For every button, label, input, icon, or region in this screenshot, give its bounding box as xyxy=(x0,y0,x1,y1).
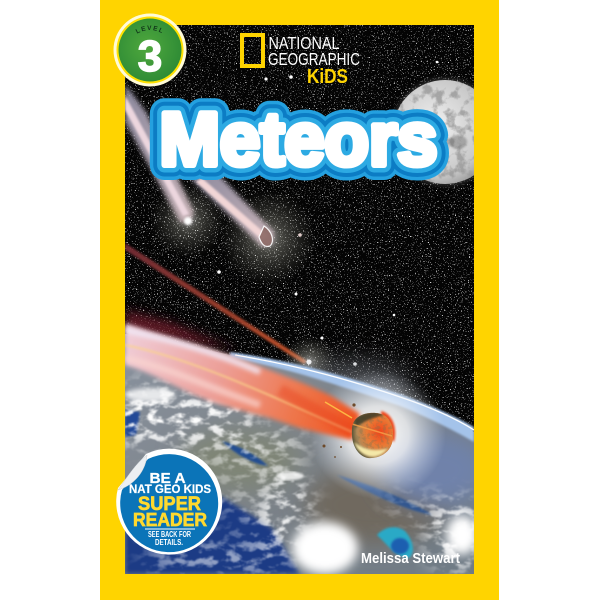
National Geographic Kids logo xyxy=(242,33,360,88)
sky haze above horizon xyxy=(290,361,410,409)
sticker text: SEE BACK FOR xyxy=(148,530,191,539)
sticker text: SUPER xyxy=(138,494,201,515)
sticker text: READER xyxy=(133,509,207,530)
sticker text: BE A xyxy=(150,470,186,487)
ocean and land patches xyxy=(125,410,490,574)
bright cloud banks xyxy=(125,388,478,574)
cloud texture xyxy=(125,372,474,574)
level badge xyxy=(114,14,186,86)
earth with clouds xyxy=(125,320,490,574)
sticker text: NAT GEO KIDS xyxy=(129,482,211,496)
author name: Melissa Stewart xyxy=(361,551,460,567)
turquoise lake xyxy=(377,527,413,558)
sticker text: DETAILS. xyxy=(155,538,183,547)
level badge: LEVEL xyxy=(136,26,162,34)
super reader sticker xyxy=(116,449,222,555)
sticker text xyxy=(129,470,211,547)
title: Meteors xyxy=(160,97,438,181)
glow around fireball xyxy=(310,371,446,499)
book cover yellow border xyxy=(100,0,499,600)
red meteor streak xyxy=(125,242,332,372)
meteor streak left xyxy=(125,84,226,258)
flying debris xyxy=(322,403,356,458)
level number: 3 xyxy=(138,32,162,81)
National Geographic Kids logo: KiDS xyxy=(307,66,348,88)
moon xyxy=(394,76,474,188)
title: Meteors xyxy=(160,97,438,181)
meteor rock xyxy=(322,403,395,460)
meteor streak right xyxy=(188,176,310,280)
atmosphere glow xyxy=(125,310,474,442)
National Geographic Kids logo: NATIONAL xyxy=(268,33,340,53)
starry sky xyxy=(125,25,474,432)
sticker peel xyxy=(118,455,147,490)
cover artwork xyxy=(125,25,499,574)
title: Meteors xyxy=(160,97,438,181)
National Geographic Kids logo: GEOGRAPHIC xyxy=(268,49,360,69)
fireball tail xyxy=(125,323,360,440)
title: Meteors xyxy=(160,97,438,181)
level label xyxy=(134,30,166,36)
